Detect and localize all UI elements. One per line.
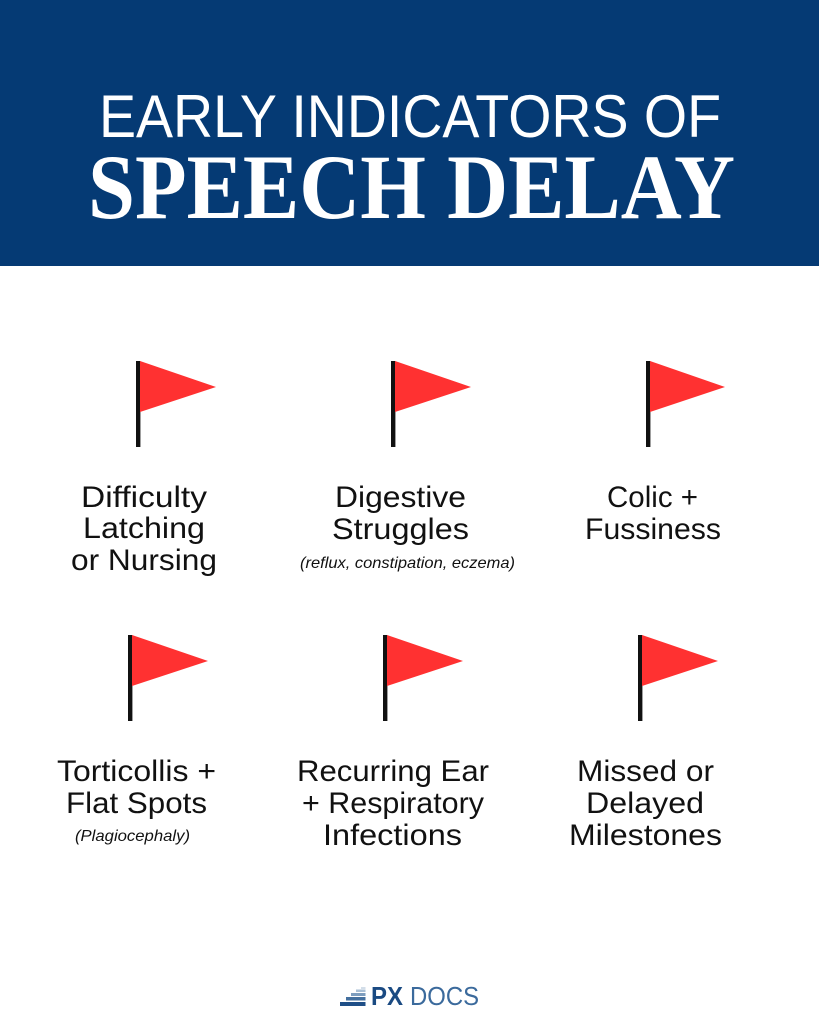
label: Flat Spots xyxy=(66,787,207,820)
label xyxy=(71,481,217,577)
label: Delayed xyxy=(586,787,704,820)
item: recurring ear and respiratory infections xyxy=(297,635,489,852)
label: Fussiness xyxy=(585,513,721,546)
item: colic and fussiness xyxy=(585,361,725,546)
label: Colic + xyxy=(607,481,698,514)
label xyxy=(297,755,489,852)
icon: red flag xyxy=(128,635,208,721)
label: Digestive xyxy=(335,481,466,514)
icon: red flag xyxy=(136,361,216,447)
label: or Nursing xyxy=(71,544,217,577)
item: torticollis and flat spots xyxy=(57,635,216,845)
label xyxy=(569,755,722,852)
label: Torticollis + xyxy=(57,755,216,788)
logo: PX Docs xyxy=(340,981,479,1011)
icon: red flag xyxy=(638,635,718,721)
logo: PX Docs: DOCS xyxy=(410,981,479,1011)
label: + Respiratory xyxy=(302,787,484,820)
icon: red flag xyxy=(383,635,463,721)
label xyxy=(585,481,721,546)
wordmark: PX xyxy=(371,981,404,1011)
icon: red flag xyxy=(391,361,471,447)
label xyxy=(57,755,216,820)
item: digestive struggles xyxy=(300,361,515,572)
label: Milestones xyxy=(569,819,722,852)
item: difficulty latching or nursing xyxy=(71,361,217,577)
item: missed or delayed milestones xyxy=(569,635,722,852)
title line 2: SPEECH DELAY xyxy=(88,136,735,238)
label: Struggles xyxy=(332,513,469,546)
title line 1: EARLY INDICATORS OF xyxy=(99,83,721,150)
header banner xyxy=(0,0,819,266)
icon: stair bars xyxy=(340,987,366,1006)
label: Missed or xyxy=(577,755,714,788)
label xyxy=(332,481,469,546)
note: (Plagiocephaly) xyxy=(75,828,190,845)
label: Latching xyxy=(83,512,205,545)
label: Infections xyxy=(323,819,462,852)
icon: red flag xyxy=(646,361,725,447)
label: Difficulty xyxy=(81,481,207,514)
note: (reflux, constipation, eczema) xyxy=(300,555,515,572)
label: Recurring Ear xyxy=(297,755,489,788)
